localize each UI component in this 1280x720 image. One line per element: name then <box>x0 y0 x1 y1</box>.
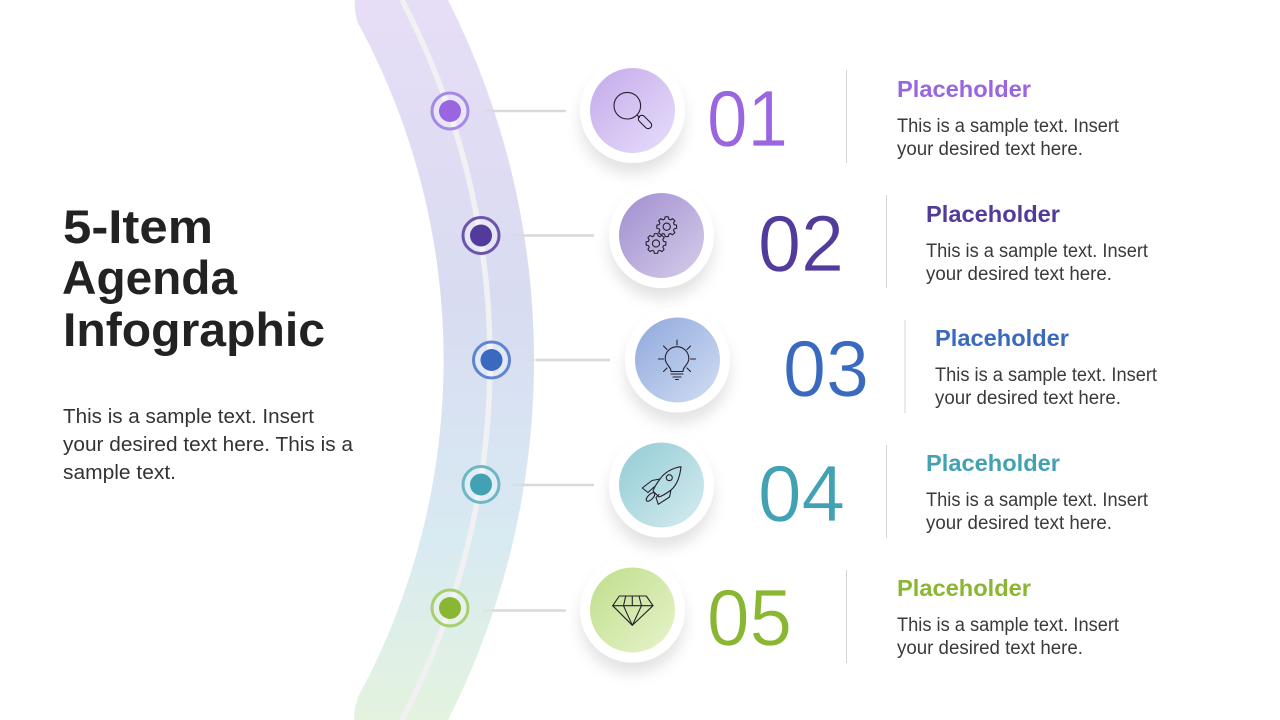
connector 3 <box>528 359 610 361</box>
text block 5 <box>897 575 1120 659</box>
icon circle 2: gears <box>609 183 714 288</box>
text block 5: Placeholder <box>897 575 1031 601</box>
text block 2: Placeholder <box>926 201 1060 227</box>
connector 2 <box>512 234 594 237</box>
text block 4 <box>926 450 1149 534</box>
divider 1 <box>846 70 847 163</box>
title: Agenda <box>62 251 238 304</box>
text block 1: Placeholder <box>897 76 1031 102</box>
icon circle 3: light bulb <box>625 308 730 412</box>
text block 5: your desired text here. <box>897 638 1083 659</box>
item 3 <box>474 308 1158 413</box>
text block 2 <box>926 201 1149 285</box>
title <box>62 200 325 356</box>
text block 4: Placeholder <box>926 450 1060 476</box>
icon circle 5: diamond <box>580 558 685 662</box>
text block 1: your desired text here. <box>897 139 1083 160</box>
item 2 <box>463 183 1149 288</box>
icon circle 4: rocket <box>609 432 714 538</box>
text block 3 <box>935 325 1158 409</box>
divider 2 <box>886 195 887 288</box>
text block 4: your desired text here. <box>926 513 1112 534</box>
item 5 <box>432 558 1120 663</box>
marker 1 <box>432 93 468 129</box>
connector 5 <box>483 609 566 612</box>
title: 5-Item <box>63 200 213 253</box>
text block 4: This is a sample text. Insert <box>926 490 1149 511</box>
intro text: your desired text here. This is a <box>63 434 354 456</box>
number 05: 05 <box>707 573 792 662</box>
intro text <box>63 406 354 484</box>
icon circle 1: magnifier <box>580 58 685 163</box>
intro text: sample text. <box>63 462 176 484</box>
number 03: 03 <box>783 324 869 413</box>
text block 2: This is a sample text. Insert <box>926 241 1149 262</box>
text block 2: your desired text here. <box>926 264 1112 285</box>
text block 3: Placeholder <box>935 325 1069 351</box>
number 02: 02 <box>758 199 844 288</box>
number 04: 04 <box>758 449 845 538</box>
text block 1 <box>897 76 1120 160</box>
text block 5: This is a sample text. Insert <box>897 615 1120 636</box>
text block 3: your desired text here. <box>935 388 1121 409</box>
marker 4 <box>463 466 499 502</box>
curved gradient band <box>354 0 534 720</box>
item 4 <box>463 432 1149 538</box>
title: Infographic <box>63 303 325 356</box>
intro text: This is a sample text. Insert <box>63 406 314 428</box>
marker 3 <box>474 342 510 378</box>
connector 4 <box>512 484 594 486</box>
divider 3 <box>904 320 906 413</box>
marker 2 <box>463 218 499 254</box>
number 01: 01 <box>707 74 788 163</box>
text block 1: This is a sample text. Insert <box>897 116 1120 137</box>
marker 5 <box>432 590 468 626</box>
divider 5 <box>846 570 847 663</box>
text block 3: This is a sample text. Insert <box>935 365 1158 386</box>
connector 1 <box>483 110 566 112</box>
divider 4 <box>886 445 887 538</box>
item 1 <box>432 58 1120 163</box>
